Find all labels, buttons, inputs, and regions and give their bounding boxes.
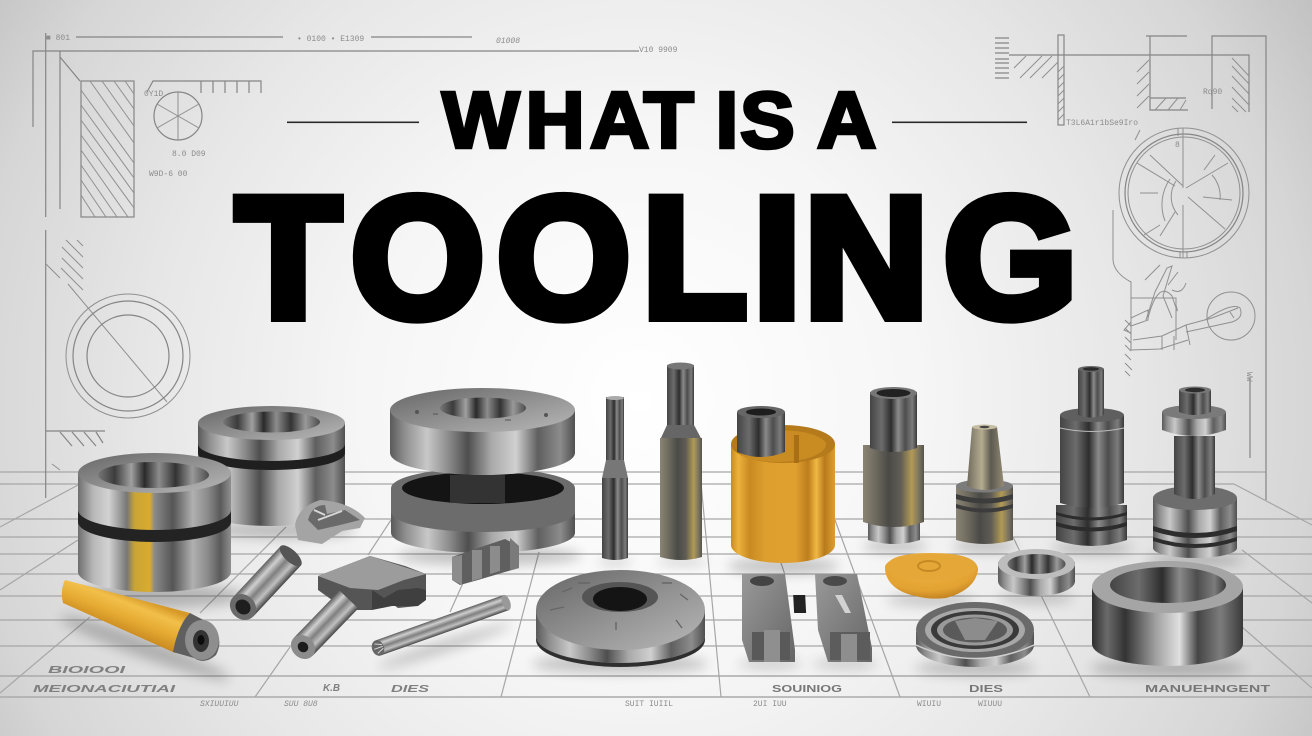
tool: toothed comb	[452, 538, 519, 585]
tool: right clip	[815, 574, 872, 662]
tool: flat disc die	[536, 570, 705, 667]
blueprint: small notes: 0Y1D	[144, 90, 163, 99]
tool: long pin	[370, 594, 513, 658]
right notes: Rq90	[1203, 88, 1222, 97]
dimension bracket	[147, 81, 261, 93]
tool: bearing disc	[916, 602, 1034, 667]
hatching	[61, 240, 83, 290]
tool: thin punch	[602, 396, 628, 560]
narrow section bar	[1058, 35, 1064, 125]
tool: hammer punch	[286, 556, 426, 664]
tool: small formed piece	[295, 500, 365, 544]
blueprint: top-left drawing	[33, 33, 639, 498]
blueprint: small notes: • 0100 • E1309	[297, 35, 364, 44]
blueprint: small notes: V10 9909	[639, 46, 678, 55]
section circle	[154, 92, 202, 140]
tool: large ring	[1092, 561, 1243, 666]
tool: yellow rod	[62, 580, 219, 661]
blueprint: small notes	[46, 34, 678, 179]
floor shadows	[57, 522, 1246, 688]
hatched block	[81, 81, 134, 217]
tool: yellow dome	[885, 553, 978, 599]
tool: small ring	[998, 549, 1075, 596]
right notes: T3L6A1r1bSe9Iro	[1066, 119, 1138, 128]
tool: mushroom punch	[1153, 386, 1237, 558]
blueprint: small notes: ■ 801	[46, 34, 70, 43]
floor labels: WIUUU	[978, 700, 1002, 709]
tool: tall punch	[660, 362, 702, 560]
tool: left clip	[742, 574, 806, 662]
floor labels: MEIONACIUTIAI	[33, 684, 175, 695]
blueprint: small notes: 01008	[496, 37, 520, 46]
floor labels: SUU 8U8	[284, 700, 318, 709]
tool: stacked die top ring	[390, 388, 575, 553]
tool: short cylinder	[225, 542, 305, 625]
divider: right of heading	[892, 122, 1027, 123]
right notes: 8	[1175, 141, 1180, 150]
heading: what is a: WHAT IS A	[442, 76, 876, 165]
tool: rear bushing	[198, 406, 345, 526]
blueprint: small notes: 8.0 D09	[172, 150, 206, 159]
floor labels: 2UI IUU	[753, 700, 787, 709]
tool: tall flanged punch	[1056, 366, 1127, 546]
gauge circle	[1119, 128, 1249, 258]
floor labels: MANUEHNGENT	[1145, 684, 1270, 695]
tool: stepped bushing	[863, 387, 924, 544]
heading: tooling: TOOLING	[236, 162, 1077, 354]
right notes	[1066, 88, 1253, 382]
floor labels: SXIUUIUU	[200, 700, 239, 709]
floor labels: SUIT IUIIL	[625, 700, 673, 709]
concentric circles	[46, 264, 190, 418]
tool: gold cup with insert	[731, 406, 835, 563]
floor labels: K.B	[323, 683, 340, 694]
right notes: WW	[1244, 372, 1253, 382]
floor labels	[33, 665, 1270, 709]
cam and lever	[1113, 210, 1255, 376]
blueprint: top-right drawing	[995, 35, 1266, 500]
floor labels: SOUINIOG	[772, 684, 842, 695]
blueprint: small notes: W9D-6 00	[149, 170, 188, 179]
floor labels: BIOIOOI	[48, 665, 125, 676]
blueprint: floor grid	[0, 472, 1312, 697]
tool: front bushing	[78, 453, 231, 592]
floor labels: DIES	[969, 684, 1003, 695]
floor labels: DIES	[391, 684, 430, 695]
floor labels: WIUIU	[917, 700, 941, 709]
tool: tapered cone	[956, 424, 1013, 544]
divider: left of heading	[287, 122, 419, 123]
